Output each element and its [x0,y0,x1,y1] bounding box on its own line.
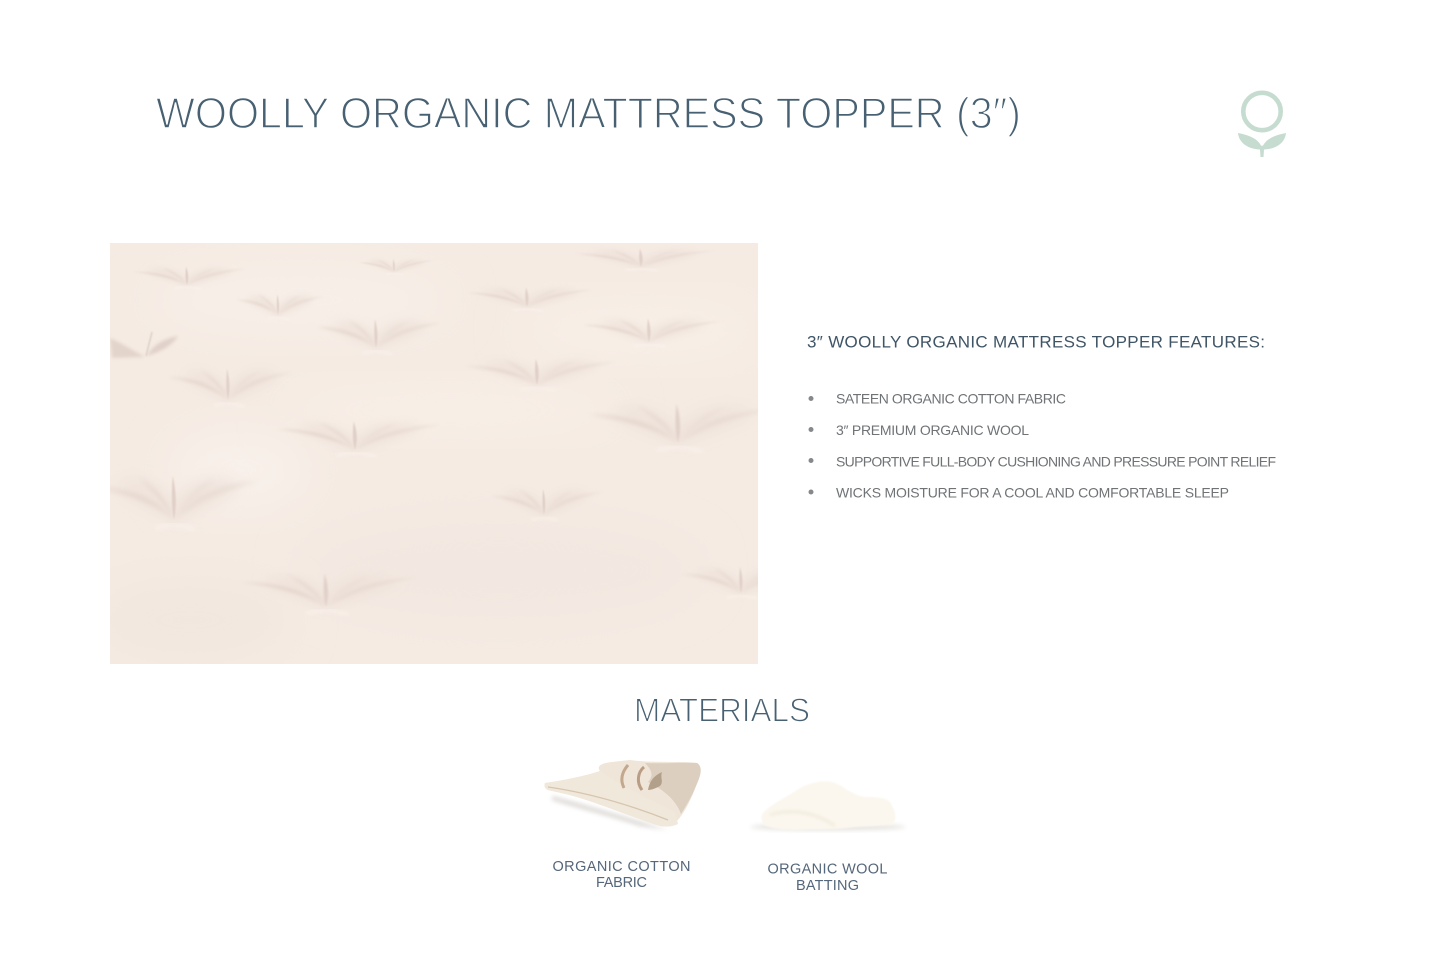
title: WOOLLY ORGANIC MATTRESS TOPPER (3″) [156,89,1021,138]
feature list [808,390,1276,500]
feature list: 3″ PREMIUM ORGANIC WOOL [836,422,1029,438]
icon: flower logo [1238,93,1286,157]
label: organic wool batting [768,862,888,894]
icon: organic wool batting [750,781,906,830]
label: organic cotton fabric [552,859,690,891]
heading: features: 3″ WOOLLY ORGANIC MATTRESS TOPPER FEATURES: [807,332,1265,352]
icon: folded organic cotton fabric [544,760,701,830]
heading: materials: MATERIALS [634,692,810,728]
label: organic cotton fabric: FABRIC [596,875,647,891]
feature list: SATEEN ORGANIC COTTON FABRIC [836,390,1066,406]
tuft marks [110,250,758,607]
label: organic wool batting: ORGANIC WOOL [768,862,888,878]
label: organic cotton fabric: ORGANIC COTTON [552,859,690,875]
feature list: SUPPORTIVE FULL-BODY CUSHIONING AND PRESSURE POINT RELIEF [836,454,1276,470]
feature list: WICKS MOISTURE FOR A COOL AND COMFORTABLE SLEEP [836,484,1229,500]
photo: tufted mattress topper surface [90,243,807,664]
label: organic wool batting: BATTING [796,878,859,894]
